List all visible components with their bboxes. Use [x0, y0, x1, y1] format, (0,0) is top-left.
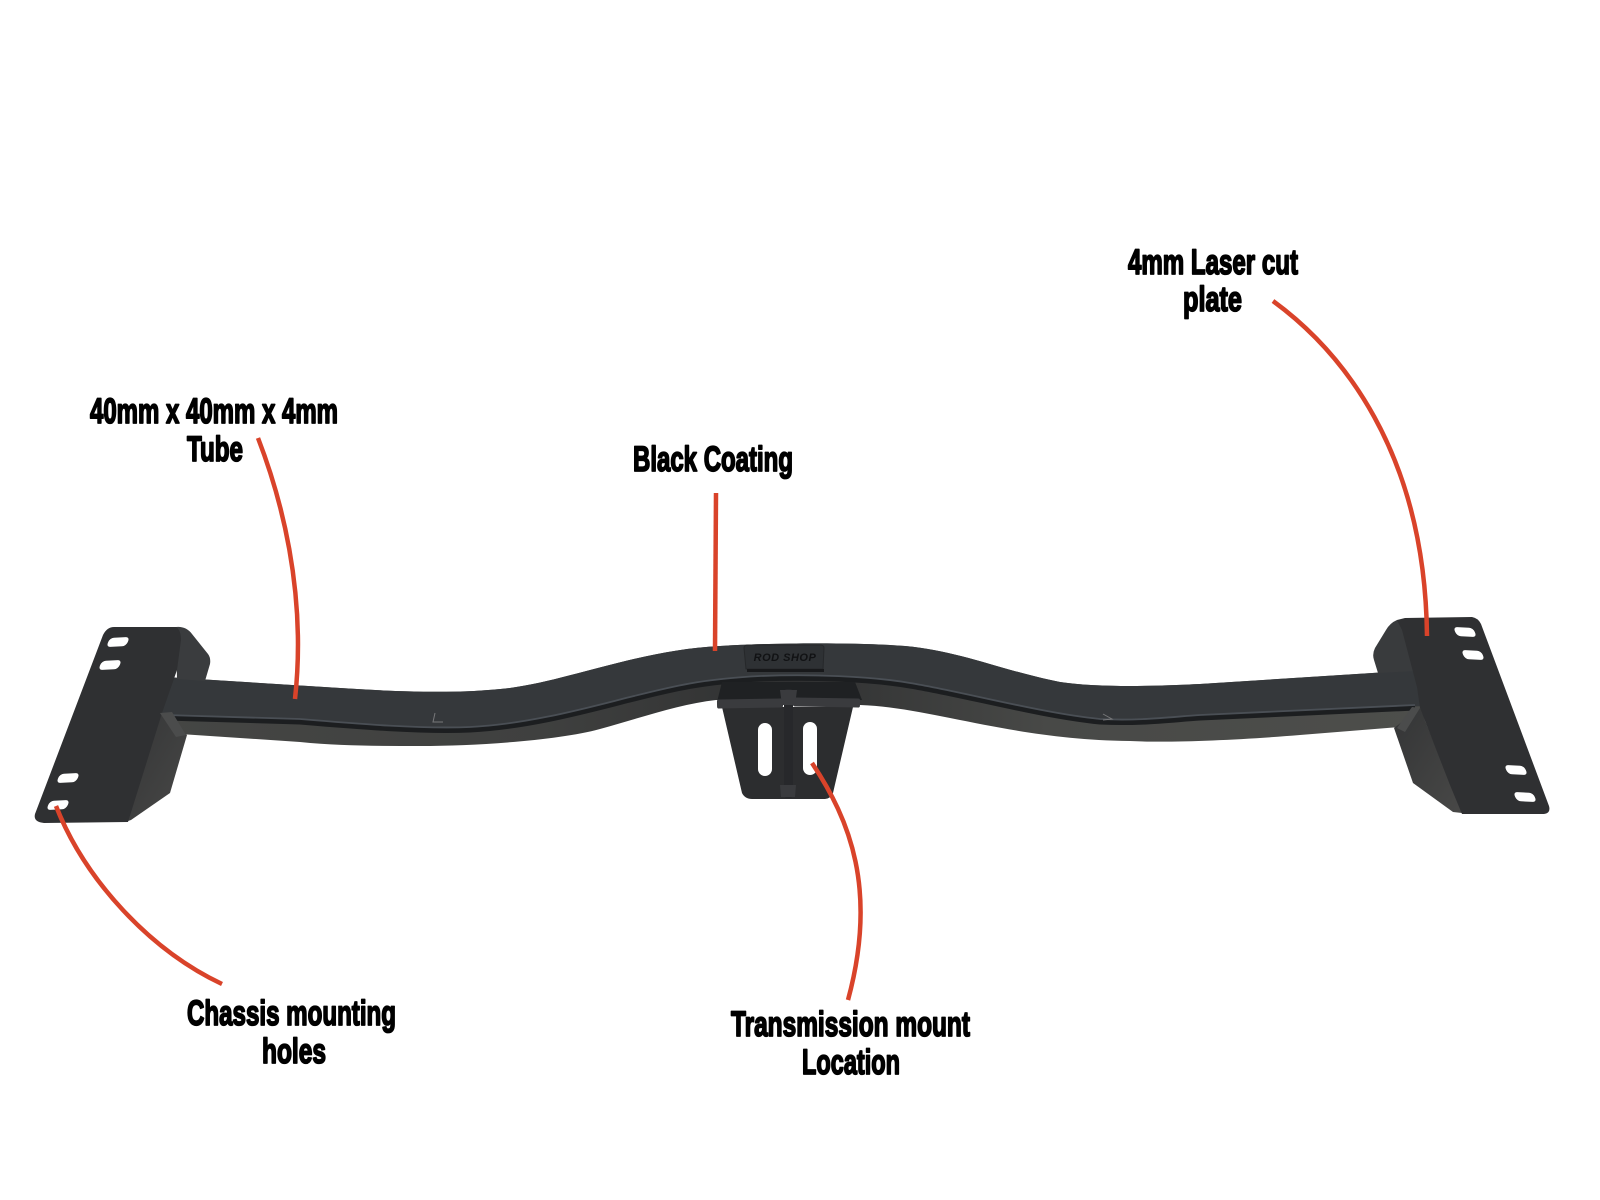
- label: chassis mounting holes: [187, 994, 396, 1071]
- right mounting plate: [1373, 617, 1549, 814]
- label: laser cut plate: plate: [1183, 280, 1242, 319]
- arrow: chassis mounting holes: [56, 806, 222, 984]
- arrow: tube: [258, 438, 298, 699]
- label: chassis mounting holes: holes: [262, 1032, 326, 1071]
- arrow: transmission mount: [812, 763, 861, 1000]
- label: laser cut plate: [1128, 243, 1298, 319]
- label: transmission mount location: [731, 1005, 970, 1082]
- tube: [160, 643, 1425, 746]
- label: chassis mounting holes: Chassis mounting: [187, 994, 396, 1033]
- left mounting plate: [35, 627, 210, 823]
- label: black coating: Black Coating: [633, 440, 793, 479]
- label: tube size: Tube: [187, 430, 243, 469]
- label: transmission mount location: Transmission mount: [731, 1005, 970, 1044]
- label: tube size: [90, 392, 338, 469]
- arrow: black coating: [715, 493, 716, 651]
- label: laser cut plate: 4mm Laser cut: [1128, 243, 1298, 282]
- arrow: laser cut plate: [1273, 301, 1427, 636]
- rod shop badge: [744, 645, 824, 672]
- crossmember photo: [35, 617, 1549, 823]
- label: transmission mount location: Location: [802, 1043, 900, 1082]
- rod shop badge: ROD SHOP: [754, 652, 816, 664]
- transmission mount bracket: [717, 682, 862, 799]
- label: tube size: 40mm x 40mm x 4mm: [90, 392, 338, 431]
